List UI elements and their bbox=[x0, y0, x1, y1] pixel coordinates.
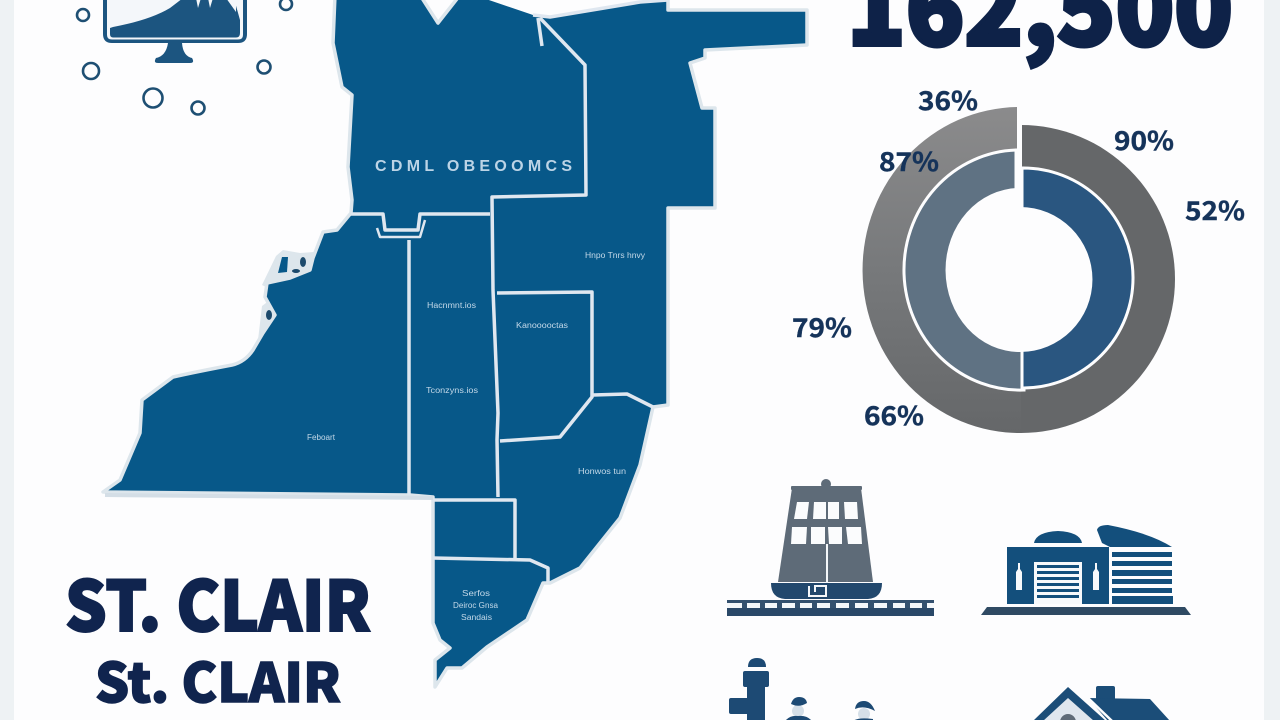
map: top edge fill bbox=[480, 0, 668, 17]
title: St. Clair bbox=[65, 551, 371, 718]
map: district labels: Hnpo Tnrs hnvy bbox=[585, 251, 645, 260]
map: coastal islands bbox=[266, 257, 306, 320]
map: district labels: Tconzyns.ios bbox=[426, 386, 478, 395]
icon: two people bbox=[785, 697, 875, 720]
title: St. Clair: St. CLAIR bbox=[95, 639, 341, 718]
icon: house bbox=[1033, 686, 1170, 720]
map: St. Clair county bbox=[103, 0, 807, 687]
map: district labels: Deiroc Gnsa bbox=[453, 601, 499, 610]
map: coastal bay bbox=[258, 250, 317, 340]
icon: warehouse bbox=[981, 525, 1191, 615]
chart labels: 66% bbox=[864, 396, 924, 433]
chart labels bbox=[792, 81, 1245, 433]
map: district labels: Honwos tun bbox=[578, 467, 626, 476]
map: district labels: Kanooooctas bbox=[516, 321, 568, 330]
chart labels: 87% bbox=[879, 142, 939, 179]
chart labels: 90% bbox=[1114, 121, 1174, 158]
chart labels: 52% bbox=[1185, 191, 1245, 228]
icon: decorative circles bbox=[77, 0, 292, 114]
icon: tower bbox=[729, 658, 769, 720]
title: St. Clair: ST. CLAIR bbox=[65, 551, 371, 651]
icon: monitor with mountain bbox=[103, 0, 247, 63]
map: district borders bbox=[105, 0, 668, 583]
chart labels: 79% bbox=[792, 308, 852, 345]
icon: ship building bbox=[727, 479, 934, 616]
map: region heading: CDML OBEOOMCS bbox=[375, 158, 572, 175]
map: district labels: Hacnmnt.ios bbox=[427, 301, 476, 310]
map: district labels bbox=[307, 251, 645, 622]
map: district labels: Feboart bbox=[307, 433, 336, 442]
map: district labels: Sandais bbox=[461, 613, 492, 622]
chart: spiral donut bbox=[792, 81, 1245, 433]
map outline bbox=[103, 0, 807, 687]
map: district labels: Serfos bbox=[462, 589, 490, 598]
chart labels: 36% bbox=[918, 81, 978, 118]
